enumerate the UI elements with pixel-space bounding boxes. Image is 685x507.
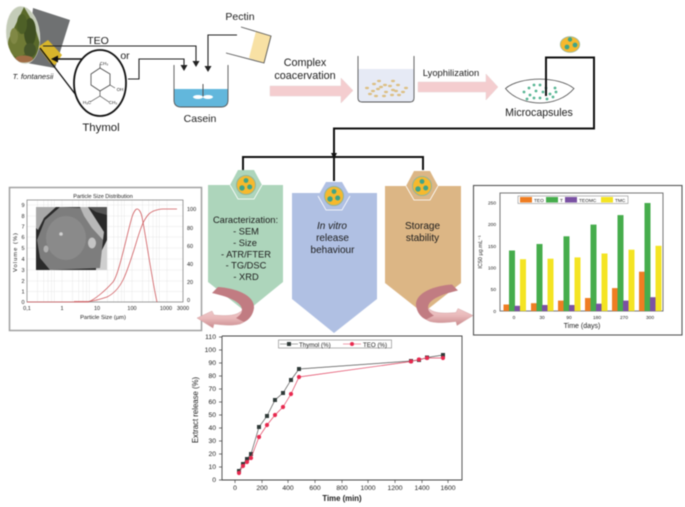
y axis title: Volume (%): [13, 232, 19, 272]
icon: petri dish with microcapsules: [506, 79, 574, 103]
icon: characterization hexagon capsule: [230, 170, 262, 199]
x axis title: Time (days): [564, 323, 600, 330]
text: characterization list: - Size: [233, 238, 257, 248]
x axis labels: 400: [282, 485, 294, 492]
icon: coacervate beaker: [358, 56, 414, 102]
x axis labels: 200: [256, 485, 268, 492]
curve: volume distribution: [27, 209, 157, 302]
x axis labels: 0: [513, 315, 516, 321]
connector: microcapsules to characterisation branches: [243, 58, 594, 181]
bar chart legend: T: [560, 198, 563, 204]
left axis labels: 9: [21, 203, 25, 209]
series T bars: [509, 203, 650, 311]
series Thymol: [237, 353, 445, 473]
left axis labels: 5: [21, 246, 25, 252]
y axis labels: 10: [208, 464, 216, 471]
right axis labels: 20: [187, 280, 193, 286]
label: or: or: [120, 50, 130, 62]
left axis labels: 1: [21, 290, 25, 296]
y axis labels: 60: [208, 399, 216, 406]
chart: particle size distribution: [10, 188, 202, 330]
y axis labels: 90: [208, 360, 216, 367]
right axis labels: [187, 207, 196, 304]
right axis labels: 60: [187, 244, 193, 250]
arrow: complex coacervation: [270, 78, 353, 103]
x axis labels: 0: [233, 485, 237, 492]
series TMC bars: [520, 246, 662, 311]
icon: thymol molecule: CH₃: [100, 61, 108, 66]
x axis labels: 1200: [387, 485, 403, 492]
icon: thymol molecule: [74, 50, 126, 116]
icon: thymol molecule: OH: [117, 87, 123, 92]
panel: in vitro release: [292, 182, 377, 333]
left axis labels: 7: [21, 224, 25, 230]
text: characterization list: - TG/DSC: [226, 260, 267, 270]
bar chart legend: [518, 196, 628, 204]
y axis labels: 80: [208, 373, 216, 380]
series TEO: [237, 356, 445, 475]
line chart legend: Thymol (%): [299, 342, 331, 349]
y axis labels: 200: [488, 222, 496, 228]
arrow: lyophilization: [418, 74, 498, 100]
x axis labels: [23, 306, 189, 312]
left axis labels: 2: [21, 279, 25, 285]
bar chart legend: TEO: [534, 198, 544, 204]
y axis labels: 70: [208, 386, 216, 393]
y axis labels: 30: [208, 438, 216, 445]
left axis labels: [21, 203, 25, 306]
text: storage stability: stability: [406, 233, 439, 244]
arrow: pectin to beaker: [204, 35, 237, 72]
icon: storage hexagon capsule: [406, 171, 438, 200]
text: characterization list: - ATR/FTER: [221, 250, 271, 260]
right axis labels: 0: [187, 298, 190, 304]
arrow: thymol to plant: [40, 48, 104, 103]
y axis labels: 40: [208, 425, 216, 432]
y axis labels: [205, 334, 216, 484]
x axis title: Particle Size (µm): [80, 315, 126, 321]
line chart legend: TEO (%): [363, 342, 387, 349]
icon: T. fontanesii plant photo: [3, 4, 70, 68]
label: Microcapsules: Microcapsules: [505, 107, 573, 119]
label: Lyophilization: Lyophilization: [423, 67, 479, 78]
x axis labels: 90: [566, 315, 572, 321]
chart title: Particle Size Distribution: [73, 194, 133, 200]
y axis labels: 20: [208, 451, 216, 458]
y axis labels: 0: [212, 477, 216, 484]
arrow: curved arrow to IC50 chart: [416, 284, 473, 326]
x axis labels: [233, 485, 456, 492]
text: in vitro release behaviour: behaviour: [311, 245, 355, 256]
text: storage stability: Storage: [405, 221, 440, 232]
left axis labels: 4: [21, 257, 25, 263]
chart: extract release line chart: [191, 334, 462, 503]
bar chart legend: TMC: [615, 198, 626, 204]
icon: single microcapsule: [560, 37, 580, 52]
y axis labels: 100: [488, 266, 496, 272]
left axis labels: 0: [21, 300, 25, 306]
arrow: TEO to beaker: [43, 46, 200, 67]
text: characterization list: - XRD: [233, 272, 259, 282]
x axis labels: 1000: [160, 306, 172, 312]
panel: characterization: [208, 170, 283, 312]
text: characterization list: Caracterization:: [213, 215, 278, 225]
label: Thymol: Thymol: [82, 122, 120, 134]
curve: cumulative volume: [74, 209, 177, 302]
x axis labels: 300: [646, 315, 654, 321]
x axis labels: 270: [620, 315, 628, 321]
y axis title: IC50 µg.mL⁻¹: [478, 235, 484, 269]
y axis title: Extract release (%): [191, 376, 200, 443]
chart: IC50 bar chart: [474, 186, 682, 335]
label: Complex coacervation: Complex: [284, 57, 327, 69]
left axis labels: 3: [21, 268, 25, 274]
bar chart legend: TEOMC: [579, 198, 597, 204]
right axis labels: 80: [187, 226, 193, 232]
text: characterization list: - SEM: [233, 226, 259, 236]
y axis labels: 50: [491, 287, 496, 293]
x axis labels: 0,1: [23, 306, 31, 312]
y axis labels: 250: [488, 200, 496, 206]
left axis labels: 8: [21, 214, 25, 220]
x axis labels: 600: [309, 485, 321, 492]
icon: casein beaker: [174, 65, 228, 107]
y axis labels: 50: [208, 412, 216, 419]
micrograph inset: [36, 207, 107, 270]
x axis labels: 30: [539, 315, 545, 321]
x axis labels: [513, 315, 654, 321]
text: in vitro release behaviour: release: [316, 233, 349, 244]
y axis labels: 150: [488, 244, 496, 250]
right axis labels: 40: [187, 262, 193, 268]
icon: in vitro hexagon capsule: [318, 182, 350, 210]
x axis labels: 100: [127, 306, 137, 312]
label: Complex coacervation: coacervation: [274, 70, 336, 82]
line chart legend: [278, 340, 392, 349]
label: Pectin: Pectin: [225, 11, 255, 23]
y axis labels: 100: [205, 347, 216, 354]
y axis labels: [488, 200, 496, 315]
x axis labels: 10: [94, 306, 100, 312]
left axis labels: 6: [21, 235, 25, 241]
arrow: curved arrow to particle size chart: [197, 287, 254, 328]
y axis labels: 110: [205, 334, 216, 341]
text: in vitro release behaviour: In vitro: [317, 221, 347, 232]
x axis labels: 1: [60, 306, 64, 312]
label: T. fontanesii: T. fontanesii: [13, 72, 54, 81]
icon: thymol molecule: H₃C: [83, 100, 92, 105]
icon: pectin tube: [226, 27, 271, 63]
x axis labels: 180: [593, 315, 601, 321]
panel: storage stability: [385, 171, 461, 313]
icon: thymol molecule: CH₃: [109, 100, 117, 105]
x axis labels: 800: [336, 485, 348, 492]
x axis labels: 1400: [414, 485, 430, 492]
x axis title: Time (min): [322, 494, 362, 503]
y axis labels: 0: [493, 309, 496, 315]
series TEO bars: [504, 272, 645, 311]
x axis labels: 1600: [440, 485, 456, 492]
label: Casein: Casein: [184, 113, 217, 125]
arrow: thymol to beaker: [128, 59, 188, 79]
x axis labels: 3000: [177, 306, 189, 312]
x axis labels: 1000: [360, 485, 376, 492]
series TEOMC bars: [514, 297, 656, 311]
right axis labels: 100: [187, 207, 196, 213]
label: TEO: TEO: [87, 35, 109, 47]
